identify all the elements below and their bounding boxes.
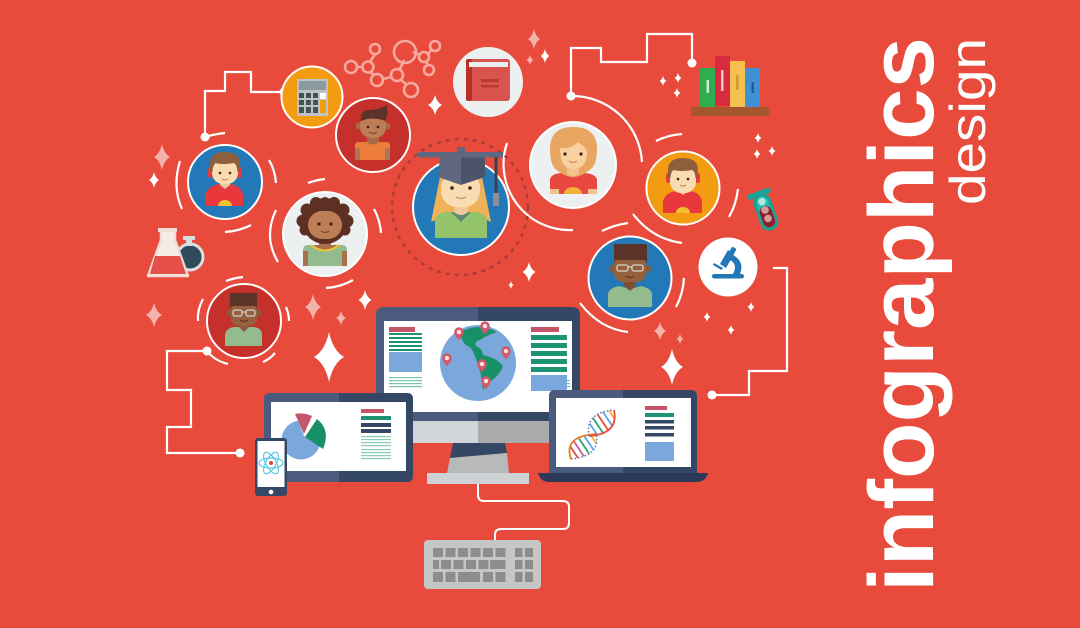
device: desktop monitor	[376, 307, 580, 484]
icon: molecule	[345, 41, 440, 97]
wire end dots	[200, 58, 716, 458]
title: infographics: infographics	[851, 37, 953, 592]
person: blonde girl on light circle	[530, 122, 616, 208]
icon: book circle	[453, 47, 523, 117]
DNA helix	[568, 409, 616, 460]
right column content	[531, 327, 570, 391]
person: boy with headphones on orange circle	[646, 152, 720, 224]
infographic canvas	[146, 29, 996, 589]
person: man with glasses on dark red circle	[207, 284, 281, 358]
device: laptop with DNA	[538, 390, 708, 482]
person: boy with headphones on blue circle	[188, 145, 262, 219]
tablet bars	[361, 409, 391, 459]
pie chart	[282, 409, 330, 460]
person: boy on dark red circle	[336, 98, 410, 172]
icon: microscope circle	[698, 238, 758, 296]
circuit wires and dots	[167, 34, 787, 453]
pink sparkles	[146, 29, 684, 344]
white sparkles	[149, 49, 776, 385]
globe map with pins	[440, 321, 516, 401]
icon: calculator circle	[282, 66, 342, 128]
device: tablet with pie chart	[264, 393, 413, 482]
person: curly-haired girl on light circle	[283, 192, 367, 276]
subtitle: design: design	[940, 38, 996, 205]
cable from monitor to keyboard	[478, 484, 569, 540]
person: man with glasses on blue circle	[588, 236, 672, 320]
icon: test tube	[747, 187, 783, 234]
person: graduate with dotted ring and cap	[392, 139, 528, 275]
device: smartphone with atom	[255, 438, 287, 496]
laptop bars	[645, 406, 674, 461]
icon: bookshelf	[691, 56, 769, 116]
left column content	[389, 327, 422, 387]
keyboard	[424, 540, 541, 589]
icon: chemistry flasks	[148, 228, 203, 276]
